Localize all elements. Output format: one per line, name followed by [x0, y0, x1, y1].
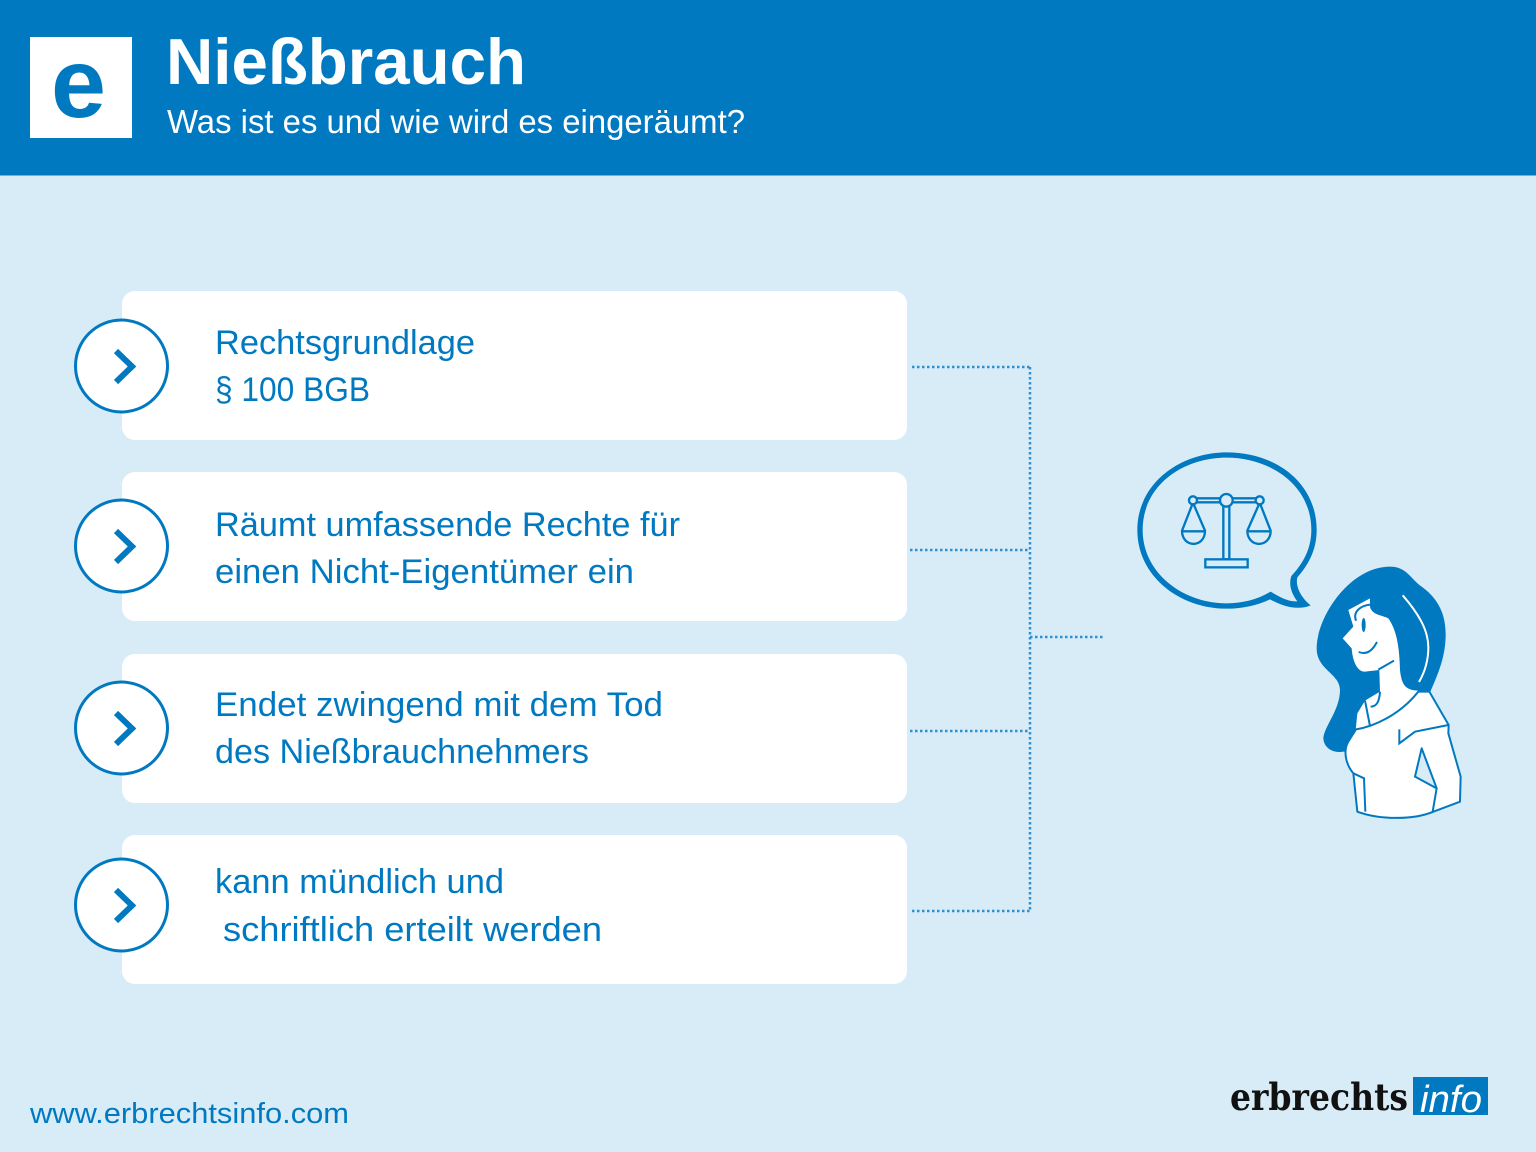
icon: chevron circle 4 — [76, 859, 168, 951]
logo: e square — [30, 28, 132, 138]
text block 3 — [215, 686, 663, 771]
icon: chevron circle 2 — [76, 500, 168, 592]
speech bubble — [1137, 452, 1317, 609]
icon: chevron circle 3 — [76, 682, 168, 774]
text block 4: kann mündlich und — [215, 863, 504, 901]
header band — [0, 0, 1536, 176]
face and neck — [1343, 598, 1418, 730]
text block 2: Räumt umfassende Rechte für — [215, 506, 680, 544]
shirt details — [1353, 692, 1448, 812]
woman figure — [1317, 567, 1461, 818]
text block 4 — [215, 863, 602, 949]
footer url: www.erbrechtsinfo.com — [29, 1098, 349, 1130]
dotted connector lines — [910, 367, 1104, 911]
logo: e square: e — [51, 28, 106, 138]
logo: erbrechtsinfo: info — [1420, 1079, 1482, 1121]
hair highlight — [1403, 595, 1428, 682]
logo: erbrechtsinfo: erbrechts — [1230, 1075, 1408, 1119]
title: Nießbrauch — [166, 25, 526, 98]
text block 3: Endet zwingend mit dem Tod — [215, 686, 663, 724]
brow — [1355, 605, 1370, 621]
panel: Rechtsgrundlage — [76, 291, 907, 440]
text block 1: § 100 BGB — [215, 371, 370, 409]
smile and jaw — [1359, 642, 1394, 670]
text block 2 — [215, 506, 680, 591]
subtitle: Was ist es und wie wird es eingeräumt? — [167, 103, 745, 140]
panel: umfassende Rechte — [76, 472, 907, 621]
icon: chevron circle 1 — [76, 320, 168, 412]
text block 4: schriftlich erteilt werden — [223, 911, 602, 949]
text block 1: Rechtsgrundlage — [215, 324, 475, 362]
eye — [1362, 618, 1366, 632]
icon: scales of justice — [1182, 494, 1271, 567]
panel: mündlich und schriftlich — [76, 835, 907, 984]
panel: Endet zwingend — [76, 654, 907, 803]
text block 1 — [215, 324, 475, 409]
text block 2: einen Nicht-Eigentümer ein — [215, 553, 634, 591]
text block 3: des Nießbrauchnehmers — [215, 733, 589, 771]
hair — [1317, 567, 1446, 752]
shirt — [1346, 692, 1461, 818]
illustration: speech bubble with scales and woman — [1137, 452, 1461, 818]
arm gap — [1415, 748, 1437, 788]
